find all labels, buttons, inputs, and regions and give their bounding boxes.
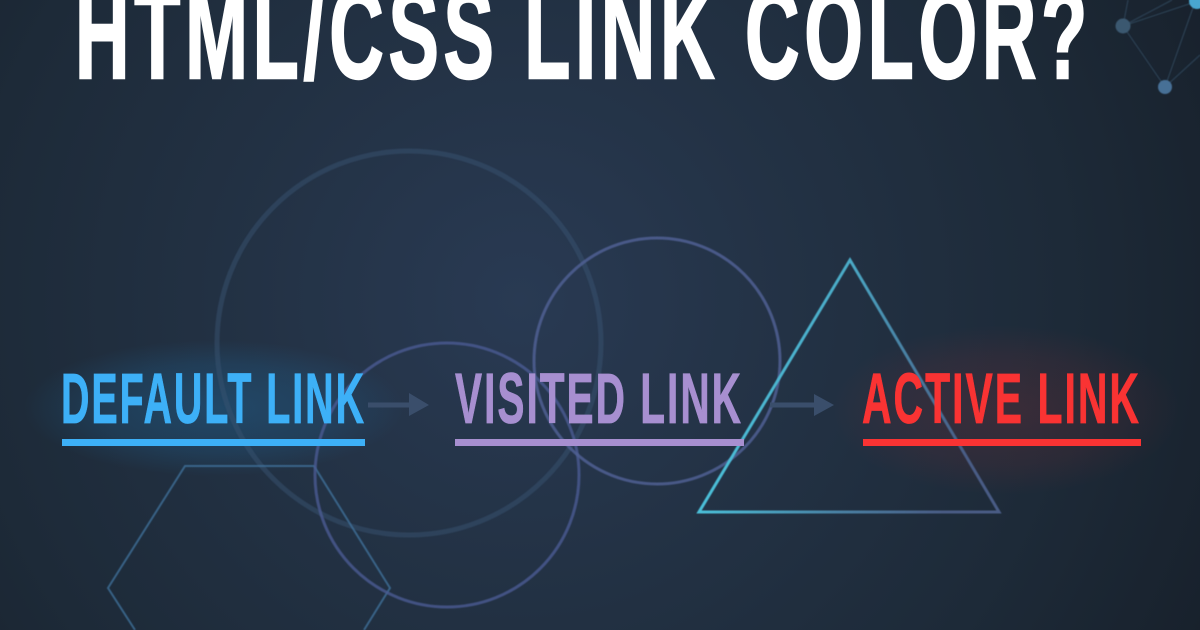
decorative shape: upper right circle [534, 238, 780, 484]
link label: default: DEFAULT LINK [61, 360, 366, 439]
decorative shape: lower circle [315, 343, 579, 607]
decorative shape: triangle [699, 260, 999, 512]
link label: visited [455, 360, 744, 446]
link label: default [61, 360, 366, 446]
arrow: default to visited [368, 393, 429, 416]
decorative shape: large faint circle [217, 151, 601, 535]
link label: visited: VISITED LINK [455, 360, 743, 439]
arrow: visited to active [770, 394, 834, 416]
decorative shape: hexagon [108, 466, 390, 630]
icon: network nodes [1116, 0, 1200, 94]
